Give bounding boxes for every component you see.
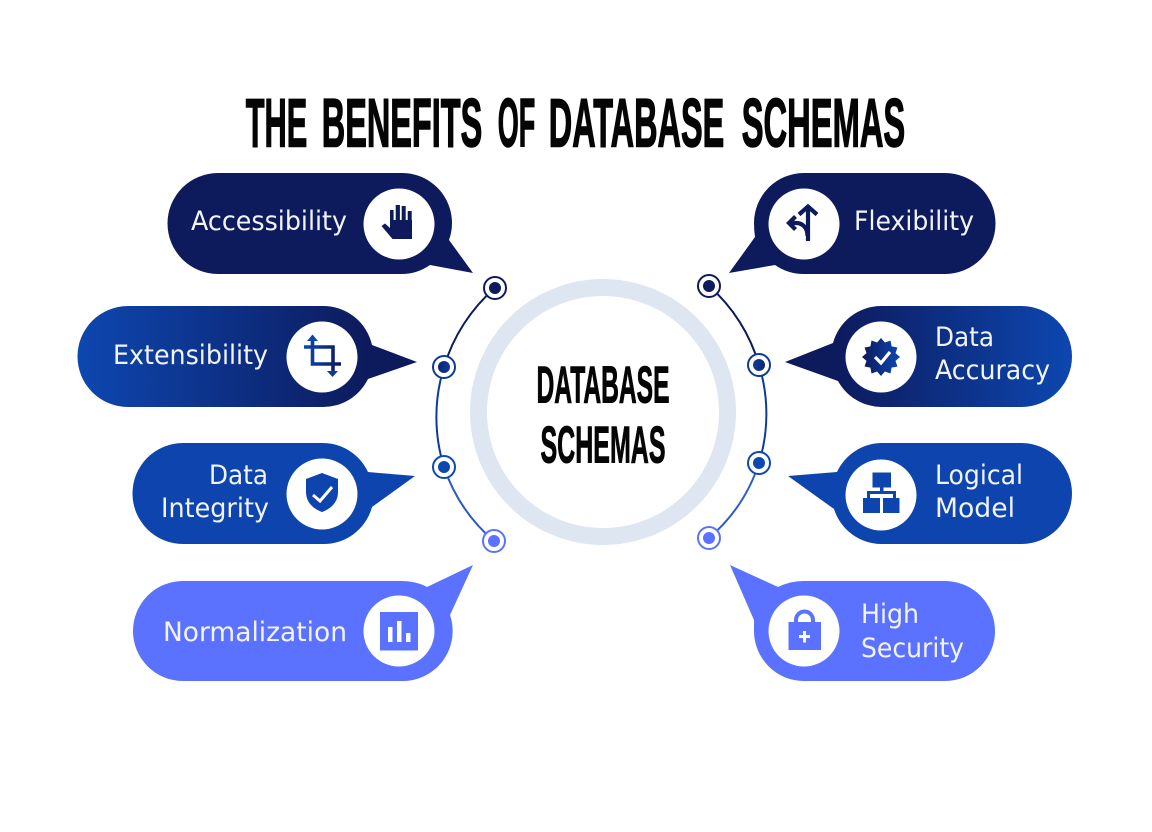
title: BENEFITS: [322, 84, 482, 162]
icon: verified badge: [846, 322, 916, 392]
text: DATABASE: [536, 356, 670, 414]
panel: data integrity: [132, 443, 415, 544]
label: Security: [861, 633, 964, 664]
left connector arc: [436, 288, 495, 541]
callout bubble: [132, 443, 415, 544]
icon: hand: [364, 188, 434, 260]
label: Data: [935, 322, 994, 353]
panel: data accuracy: [785, 306, 1072, 407]
label: [935, 460, 1023, 524]
label: [935, 322, 1050, 386]
label: [861, 599, 964, 664]
icon: hierarchy: [846, 460, 916, 530]
panel: accessibility: [168, 173, 473, 274]
icon: shield: [286, 458, 358, 530]
panel: normalization: [133, 565, 473, 681]
callout bubble: [730, 565, 995, 681]
callout bubble: [78, 306, 417, 407]
right timeline nodes: [698, 275, 770, 549]
right connector arc: [709, 286, 766, 538]
callout bubble: [785, 306, 1072, 407]
text: SCHEMAS: [742, 84, 905, 162]
label: [161, 460, 269, 524]
icon: bar chart: [364, 596, 434, 666]
label: Accuracy: [935, 355, 1050, 386]
callout bubble: [788, 443, 1072, 544]
label: Extensibility: [113, 340, 268, 371]
panel: logical model: [788, 443, 1072, 544]
callout bubble: [133, 565, 473, 681]
text: SCHEMAS: [540, 416, 666, 474]
label: Accessibility: [191, 206, 347, 237]
label: Logical: [935, 460, 1023, 491]
label: Integrity: [161, 493, 269, 524]
central ring: [478, 288, 728, 536]
label: Model: [935, 493, 1015, 524]
icon: lock: [768, 596, 840, 666]
icon: directions: [768, 188, 840, 260]
title: DATABASE: [549, 84, 724, 162]
title: [246, 84, 905, 162]
panel: extensibility: [78, 306, 417, 407]
panel: flexibility: [729, 173, 996, 274]
center label: [536, 356, 670, 474]
label: Data: [209, 460, 268, 491]
label: High: [861, 599, 919, 630]
left timeline nodes: [433, 277, 506, 552]
callout bubble: [168, 173, 473, 274]
label: Flexibility: [854, 206, 974, 237]
callout bubble: [729, 173, 996, 274]
label: Normalization: [163, 617, 347, 648]
panel: high security: [730, 565, 995, 681]
title: THE: [246, 84, 307, 162]
icon: crop: [286, 322, 358, 392]
title: OF: [498, 84, 535, 162]
